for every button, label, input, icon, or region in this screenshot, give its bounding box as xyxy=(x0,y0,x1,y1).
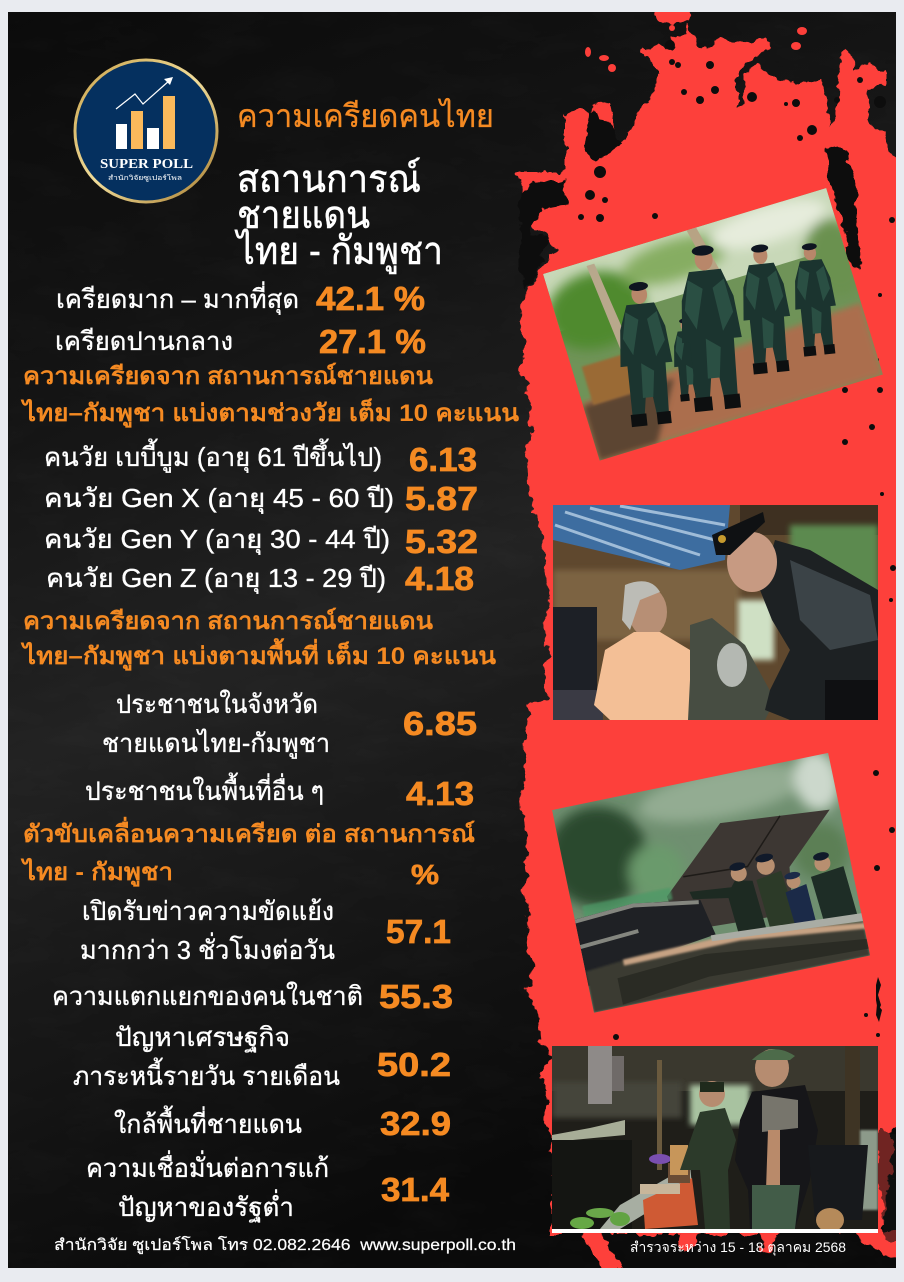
logo bars xyxy=(116,96,175,149)
top splash xyxy=(654,12,692,26)
heading: by area: ความเครียดจาก สถานการณ์ชายแดน xyxy=(23,607,434,635)
heading: by generation: ไทย–กัมพูชา แบ่งตามช่วงวัย เต็ม 10 คะแนน xyxy=(20,398,520,428)
title: ไทย - กัมพูชา xyxy=(234,229,443,274)
heading: drivers: % xyxy=(411,859,439,890)
stat rows: stress drivers: ภาระหนี้รายวัน รายเดือน xyxy=(73,1057,340,1091)
photo 4: soldiers inspecting shelter xyxy=(552,1046,878,1233)
stat rows: overall stress: 27.1 % xyxy=(319,323,426,360)
stat rows: generation scores: 5.32 xyxy=(405,523,478,560)
stat rows: stress drivers: ความเชื่อมั่นต่อการแก้ xyxy=(86,1150,329,1183)
stat rows: area scores: 4.13 xyxy=(406,775,474,812)
stat rows: stress drivers: 50.2 xyxy=(377,1046,451,1083)
red torn paint panel xyxy=(516,8,904,1268)
heading: by area xyxy=(20,607,497,671)
stat rows: stress drivers: 57.1 xyxy=(386,913,451,950)
stat rows: overall stress: เครียดมาก – มากที่สุด xyxy=(56,281,299,315)
stat rows: generation scores: 6.13 xyxy=(409,441,477,478)
stat rows: area scores: 6.85 xyxy=(403,705,477,742)
title: ชายแดน xyxy=(237,194,370,237)
stat rows: area scores: ประชาชนในพื้นที่อื่น ๆ xyxy=(85,772,324,806)
stat rows: stress drivers: 55.3 xyxy=(379,978,453,1015)
logo: Super Poll xyxy=(75,60,217,202)
survey date: สำรวจระหว่าง 15 - 18 ตุลาคม 2568 xyxy=(630,1239,846,1256)
stat rows: stress drivers: ปัญหาเศรษฐกิจ xyxy=(115,1022,290,1053)
stat rows: generation scores: 5.87 xyxy=(405,480,478,517)
stat rows: generation scores: คนวัย Gen Y (อายุ 30 - 44 ปี) xyxy=(44,524,390,555)
stat rows: stress drivers: ความแตกแยกของคนในชาติ xyxy=(52,981,363,1011)
heading: drivers xyxy=(20,816,475,890)
title xyxy=(234,157,443,274)
logo subtitle: สำนักวิจัยซูเปอร์โพล xyxy=(108,174,182,182)
stat rows: stress drivers: มากกว่า 3 ชั่วโมงต่อวัน xyxy=(80,932,335,965)
stat rows: stress drivers: 31.4 xyxy=(381,1171,450,1208)
heading: drivers: ไทย - กัมพูชา xyxy=(20,857,173,887)
stat rows: overall stress: 42.1 % xyxy=(316,280,425,317)
stat rows: generation scores: คนวัย Gen Z (อายุ 13 - 29 ปี) xyxy=(46,563,386,594)
logo name: SUPER POLL xyxy=(100,157,193,172)
stat rows: area scores xyxy=(85,689,477,812)
stat rows: stress drivers: ปัญหาของรัฐต่ำ xyxy=(118,1189,294,1223)
stat rows: overall stress: เครียดปานกลาง xyxy=(55,326,233,356)
heading: by area: ไทย–กัมพูชา แบ่งตามพื้นที่ เต็ม 10 คะแนน xyxy=(20,637,497,671)
heading: drivers: ตัวขับเคลื่อนความเครียด ต่อ สถานการณ์ xyxy=(23,816,475,848)
stat rows: area scores: ประชาชนในจังหวัด xyxy=(116,689,318,719)
stat rows: generation scores: คนวัย เบบี้บูม (อายุ 61 ปีขึ้นไป) xyxy=(44,438,382,473)
photo 3: soldiers at sandbag bunker xyxy=(536,746,875,1016)
stat rows: generation scores: 4.18 xyxy=(405,560,474,597)
logo trend arrow xyxy=(116,77,173,109)
heading: by generation: ความเครียดจาก สถานการณ์ชายแดน xyxy=(23,362,434,390)
photo 1: soldiers walking on forest road xyxy=(543,188,883,461)
stat rows: stress drivers: 32.9 xyxy=(380,1105,451,1142)
stat rows: generation scores: คนวัย Gen X (อายุ 45 - 60 ปี) xyxy=(44,483,394,514)
black splatter on red panel xyxy=(520,40,900,1240)
red droplets xyxy=(585,25,807,72)
subtitle: ความเครียดคนไทย xyxy=(237,98,494,134)
stat rows: stress drivers: เปิดรับข่าวความขัดแย้ง xyxy=(82,896,334,926)
title: สถานการณ์ xyxy=(237,157,421,201)
stat rows: overall stress xyxy=(55,280,426,360)
photo 2: officer handing bag to elderly woman xyxy=(553,505,878,720)
stat rows: area scores: ชายแดนไทย-กัมพูชา xyxy=(102,728,330,759)
stat rows: stress drivers xyxy=(52,896,453,1223)
heading: by generation xyxy=(20,362,520,428)
stat rows: stress drivers: ใกล้พื้นที่ชายแดน xyxy=(114,1105,302,1139)
footer contact: สำนักวิจัย ซูเปอร์โพล โทร 02.082.2646 www.superpoll.co.th xyxy=(54,1236,516,1255)
stat rows: generation scores xyxy=(44,438,478,597)
bottom splashes xyxy=(581,1233,623,1268)
